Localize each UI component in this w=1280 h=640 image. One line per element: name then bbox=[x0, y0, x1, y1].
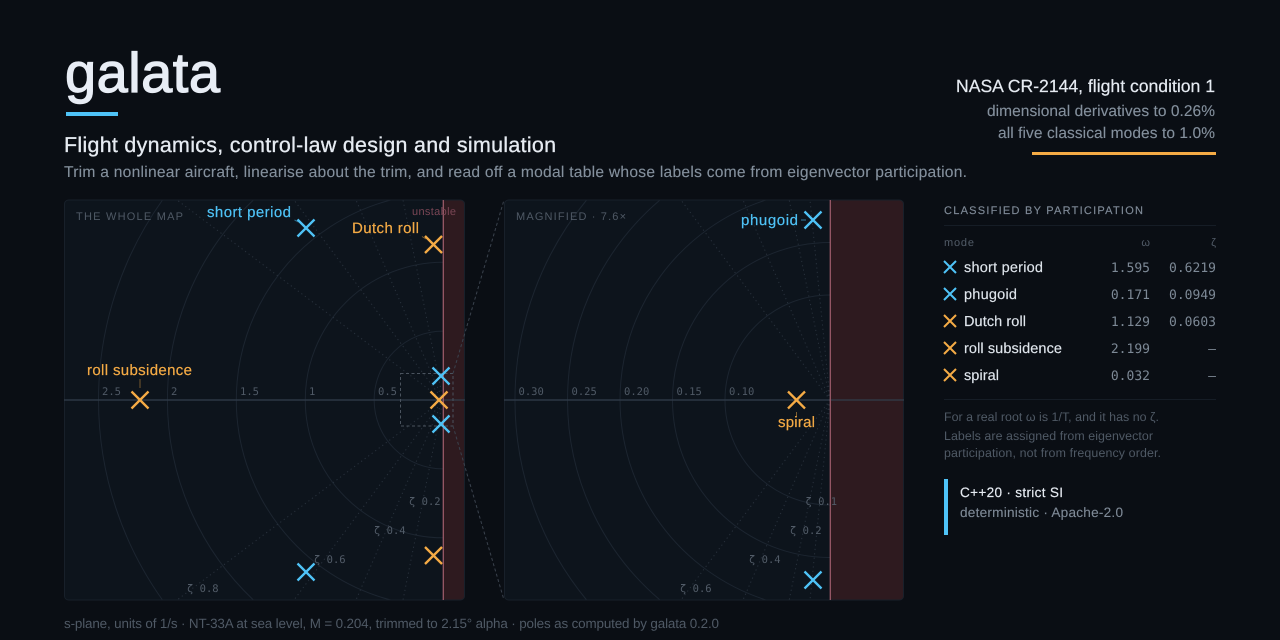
real axis bbox=[504, 399, 904, 401]
label: phugoid: phugoid bbox=[741, 212, 798, 229]
pole: short period conjugate bbox=[298, 564, 314, 580]
row: roll subsidence: 2.199 bbox=[1111, 342, 1150, 357]
frequency labels: 0.5 bbox=[378, 386, 397, 398]
frequency labels: 2.5 bbox=[102, 386, 121, 398]
damping labels: ζ 0.6 bbox=[680, 583, 712, 595]
mode accuracy: all five classical modes to 1.0% bbox=[998, 125, 1215, 142]
footer note: s-plane, units of 1/s · NT-33A at sea level, M = 0.204, trimmed to 2.15° alpha · poles as computed by galata 0.2.0 bbox=[64, 616, 719, 631]
column headers: ω bbox=[1141, 237, 1150, 249]
row: roll subsidence bbox=[944, 341, 1216, 357]
damping labels: ζ 0.2 bbox=[409, 496, 441, 508]
row: phugoid bbox=[944, 287, 1216, 303]
callout underline bbox=[1032, 152, 1216, 155]
tech callout: C++20 · strict SI bbox=[960, 485, 1063, 500]
row: short period: 0.6219 bbox=[1169, 261, 1216, 276]
frequency labels: 2 bbox=[171, 386, 177, 398]
table note: participation, not from frequency order. bbox=[944, 446, 1161, 460]
row: Dutch roll: Dutch roll bbox=[964, 314, 1026, 330]
column headers bbox=[944, 237, 1216, 249]
panel heading: MAGNIFIED · 7.6× bbox=[516, 211, 626, 223]
damping rays bbox=[681, 200, 830, 600]
pole: Dutch roll bbox=[422, 236, 442, 253]
real axis bbox=[64, 399, 465, 401]
magnifier box bbox=[400, 374, 453, 426]
row: Dutch roll bbox=[944, 314, 1216, 330]
column headers: ζ bbox=[1211, 237, 1216, 249]
pole: phugoid conjugate bbox=[432, 416, 450, 432]
frequency labels: 0.15 bbox=[676, 386, 702, 398]
frequency labels: 0.30 bbox=[518, 386, 544, 398]
frequency labels: 1.5 bbox=[240, 386, 259, 398]
pole: spiral bbox=[430, 392, 448, 408]
row: Dutch roll: 0.0603 bbox=[1169, 315, 1216, 330]
pole: short period bbox=[294, 220, 314, 236]
tech callout bbox=[944, 479, 1123, 535]
pole: phugoid bbox=[801, 212, 822, 228]
label: roll subsidence: roll subsidence bbox=[87, 362, 192, 379]
damping labels: ζ 0.1 bbox=[806, 496, 837, 508]
damping labels: ζ 0.6 bbox=[314, 554, 346, 566]
header: validation callout bbox=[956, 76, 1216, 155]
damping labels: ζ 0.2 bbox=[790, 525, 822, 537]
row: phugoid: phugoid bbox=[964, 287, 1017, 303]
unstable label: unstable bbox=[412, 206, 456, 218]
description: Trim a nonlinear aircraft, linearise about the trim, and read off a modal table whose labels come from eigenvector participation. bbox=[64, 164, 967, 181]
table note: Labels are assigned from eigenvector bbox=[944, 429, 1153, 443]
damping rays bbox=[177, 200, 443, 600]
frequency labels bbox=[102, 386, 397, 398]
frequency labels: 0.10 bbox=[729, 386, 754, 398]
frequency arcs bbox=[515, 200, 830, 600]
row: spiral bbox=[944, 368, 1216, 384]
pole: Dutch roll conjugate bbox=[425, 547, 442, 564]
damping labels bbox=[680, 496, 837, 595]
panel: mode table bbox=[944, 205, 1216, 535]
header: title block bbox=[64, 41, 967, 181]
row: roll subsidence: – bbox=[1208, 342, 1216, 357]
row: spiral: – bbox=[1208, 369, 1216, 384]
validation case: NASA CR-2144, flight condition 1 bbox=[956, 76, 1215, 96]
frequency labels bbox=[518, 386, 754, 398]
title underline bbox=[66, 112, 118, 116]
unstable region bbox=[830, 200, 904, 600]
row: phugoid: 0.0949 bbox=[1169, 288, 1216, 303]
frequency arcs bbox=[98, 200, 443, 600]
row: short period: 1.595 bbox=[1111, 261, 1150, 276]
damping labels: ζ 0.4 bbox=[374, 525, 406, 537]
damping labels bbox=[187, 496, 441, 595]
unstable region bbox=[443, 200, 465, 600]
pole: phugoid bbox=[432, 368, 450, 384]
tech callout: deterministic · Apache-2.0 bbox=[960, 505, 1123, 520]
pole: spiral bbox=[788, 392, 805, 408]
damping labels: ζ 0.4 bbox=[749, 554, 781, 566]
column headers: mode bbox=[944, 237, 974, 249]
row: short period bbox=[944, 260, 1216, 276]
label: roll subsidence bbox=[87, 362, 192, 388]
table heading: CLASSIFIED BY PARTICIPATION bbox=[944, 205, 1143, 217]
label: Dutch roll: Dutch roll bbox=[352, 220, 419, 237]
imaginary axis bbox=[442, 200, 444, 600]
title: galata bbox=[65, 41, 221, 104]
table note bbox=[944, 410, 1161, 460]
row: Dutch roll: 1.129 bbox=[1111, 315, 1150, 330]
derivative accuracy: dimensional derivatives to 0.26% bbox=[987, 103, 1215, 120]
frequency labels: 0.25 bbox=[572, 386, 597, 398]
label: spiral: spiral bbox=[778, 414, 815, 431]
row: spiral: 0.032 bbox=[1111, 369, 1150, 384]
row: spiral: spiral bbox=[964, 368, 999, 384]
panel: whole s-plane map bbox=[64, 200, 465, 600]
panel: magnified view bbox=[504, 200, 904, 600]
panel heading: THE WHOLE MAP bbox=[76, 211, 183, 223]
damping labels: ζ 0.8 bbox=[187, 583, 219, 595]
frequency labels: 0.20 bbox=[624, 386, 649, 398]
row: phugoid: 0.171 bbox=[1111, 288, 1150, 303]
row: roll subsidence: roll subsidence bbox=[964, 341, 1062, 357]
table note: For a real root ω is 1/T, and it has no ζ. bbox=[944, 410, 1159, 424]
pole: roll subsidence bbox=[132, 392, 148, 408]
subtitle: Flight dynamics, control-law design and simulation bbox=[64, 133, 556, 157]
row: short period: short period bbox=[964, 260, 1043, 276]
imaginary axis bbox=[829, 200, 831, 600]
frequency labels: 1 bbox=[309, 386, 315, 398]
label: short period: short period bbox=[207, 204, 291, 221]
magnifier connectors bbox=[453, 200, 504, 600]
pole: phugoid conjugate bbox=[804, 572, 822, 588]
